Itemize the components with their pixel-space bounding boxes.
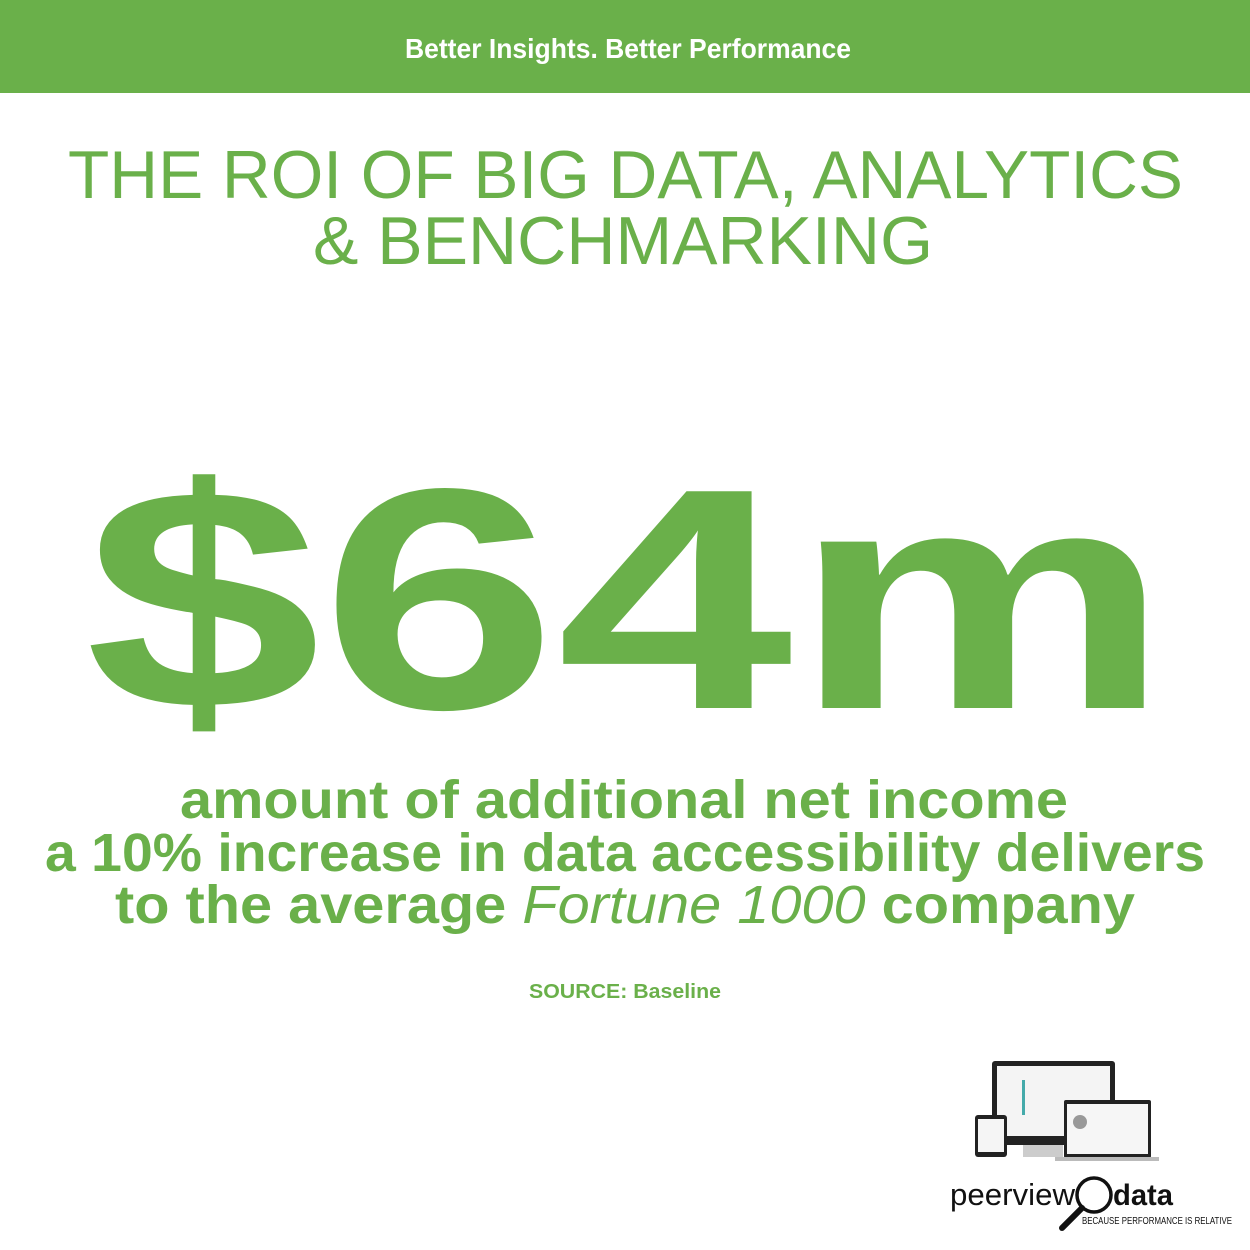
header banner: Better Insights. Better Performance <box>405 33 851 64</box>
description: to the average Fortune 1000 company <box>115 875 1135 935</box>
description: amount of additional net income <box>180 770 1068 830</box>
source: SOURCE: Baseline <box>529 981 721 1003</box>
title: & BENCHMARKING <box>313 203 933 279</box>
big number: $64m <box>85 423 1170 775</box>
logo: wordmark: data <box>1113 1179 1173 1212</box>
title: THE ROI OF BIG DATA, ANALYTICS <box>68 137 1183 213</box>
logo: wordmark: peerview <box>950 1177 1076 1212</box>
description <box>45 770 1205 935</box>
title <box>68 137 1183 279</box>
header banner <box>0 0 1250 93</box>
logo: wordmark <box>950 1177 1232 1228</box>
logo: devices <box>975 1061 1159 1161</box>
description: a 10% increase in data accessibility delivers <box>45 823 1205 883</box>
